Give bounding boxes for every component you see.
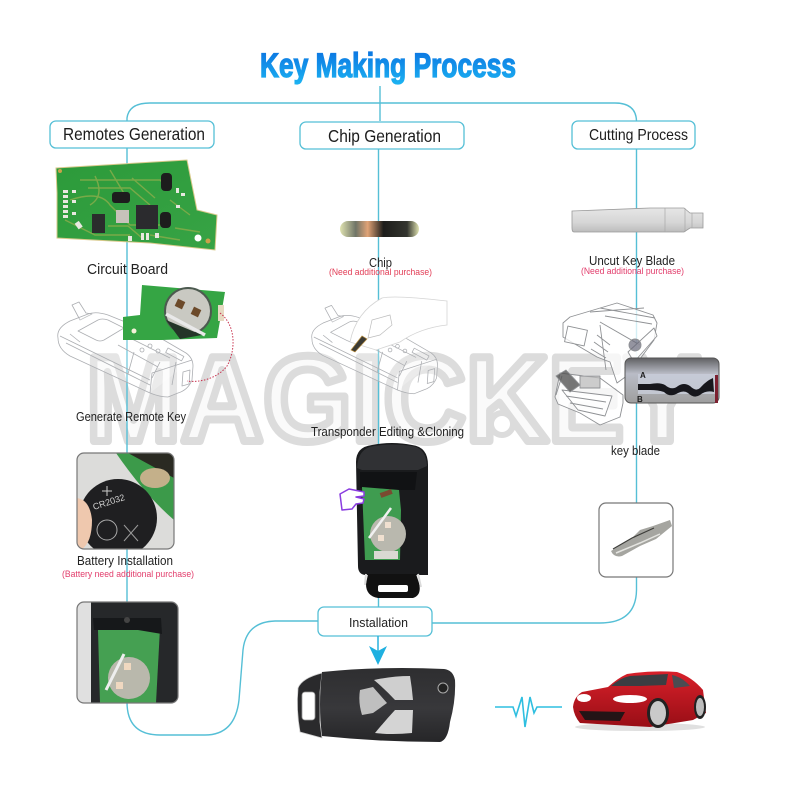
header box: Remotes Generation: Remotes Generation [63,124,205,144]
label: chip: (Need additional purchase) [329,267,432,278]
label: uncut key blade [581,253,684,277]
label: transponder editing and cloning: Transponder Editing &Cloning [311,424,464,439]
illustration: handheld programmer with hand [312,297,447,394]
icon: signal pulse [495,697,562,727]
brand watermark: MAGICKEY [86,331,700,467]
image: circuit board [56,160,217,250]
label: uncut key blade: (Need additional purchase) [581,266,684,277]
image: red sports car [573,671,706,731]
image: uncut key blade [572,208,703,232]
inset: key blade profile [625,358,719,404]
header box: Remotes Generation [50,121,214,148]
icon: pointing hand [340,489,364,510]
illustration: key cutting machine [555,303,657,425]
photo: installed battery [77,602,178,703]
process box: installation [318,607,432,636]
label: uncut key blade: Uncut Key Blade [589,253,675,268]
illustration: handheld programmer with PCB [58,285,233,397]
header box: Chip Generation [300,122,464,149]
label: battery installation [62,553,194,580]
label: circuit board: Circuit Board [87,261,168,278]
process box: installation: Installation [349,615,408,630]
inset: key blade profile: A [640,371,646,380]
label: key blade: key blade [611,443,660,458]
photo: cut key blade [599,503,673,577]
image: transponder chip [340,221,419,237]
photo: CR2032 battery: CR2032 [92,492,126,512]
image: finished key fob [297,668,455,742]
photo: CR2032 battery [77,453,174,557]
arrow: installation to remote [369,636,387,665]
header box: Chip Generation: Chip Generation [328,126,441,146]
label: chip: Chip [369,255,392,270]
header box: Cutting Process [572,121,695,149]
header box: Cutting Process: Cutting Process [589,127,688,144]
flow connector lines [127,86,636,735]
label: battery installation: Battery Installation [77,553,173,568]
photo: open remote with chip slot [356,443,428,598]
title: Key Making Process [260,47,516,85]
label: battery installation: (Battery need additional purchase) [62,569,194,580]
label: generate remote key: Generate Remote Key [76,409,186,424]
inset: key blade profile: B [637,395,643,404]
label: chip [329,255,432,278]
